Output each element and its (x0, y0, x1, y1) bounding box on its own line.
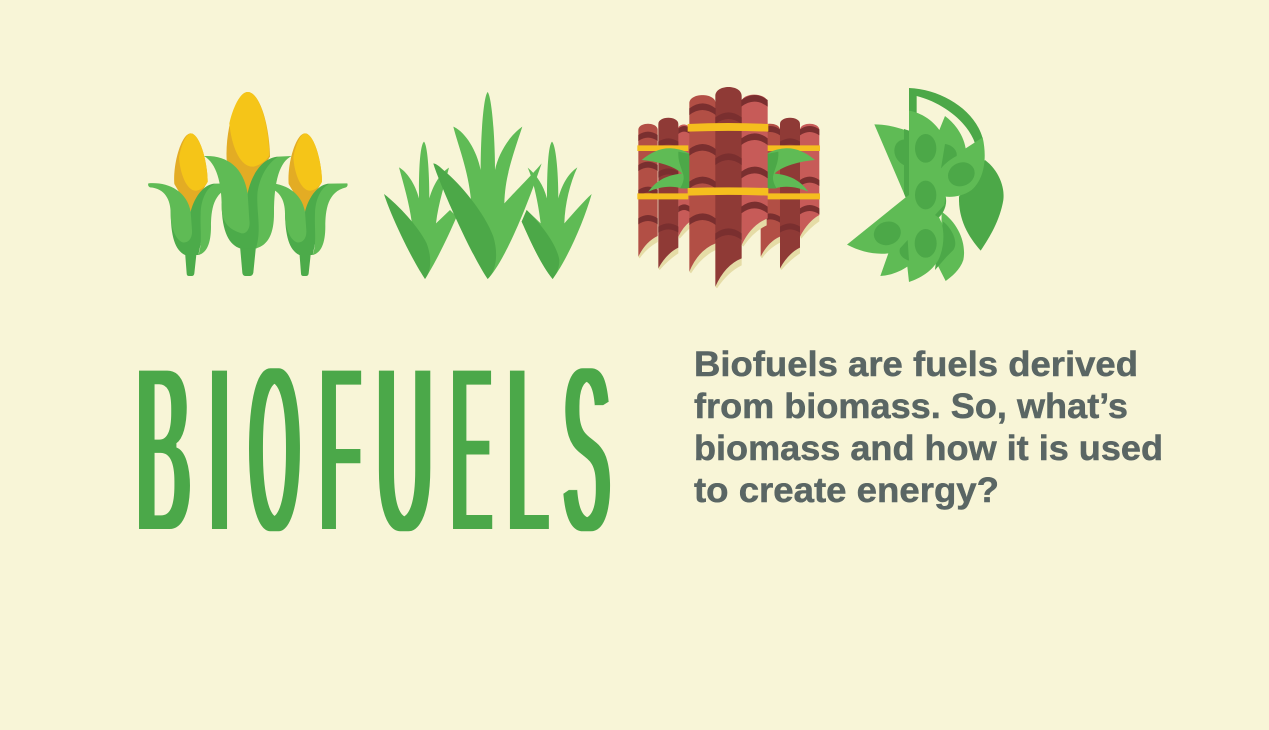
leaves (642, 148, 815, 192)
infographic: S (564, 318, 609, 582)
text block: intro (694, 345, 1163, 510)
icon: corn (148, 92, 348, 276)
icon: soybeans (847, 88, 1004, 282)
icon: sugarcane (637, 87, 820, 288)
text block: intro: Biofuels are fuels derived (694, 345, 1138, 384)
title: B (136, 318, 190, 582)
title: E (452, 318, 491, 582)
title: O (250, 318, 299, 582)
title: F (321, 318, 360, 582)
title: U (377, 318, 432, 582)
right bundle (761, 118, 820, 270)
text block: intro: to create energy? (694, 471, 999, 510)
central bundle (688, 87, 768, 288)
title: L (508, 318, 547, 582)
title: I (209, 318, 230, 582)
icon: grass (384, 92, 592, 279)
left bundle (637, 118, 690, 270)
text block: intro: biomass and how it is used (694, 429, 1163, 468)
text block: intro: from biomass. So, what’s (694, 387, 1128, 426)
